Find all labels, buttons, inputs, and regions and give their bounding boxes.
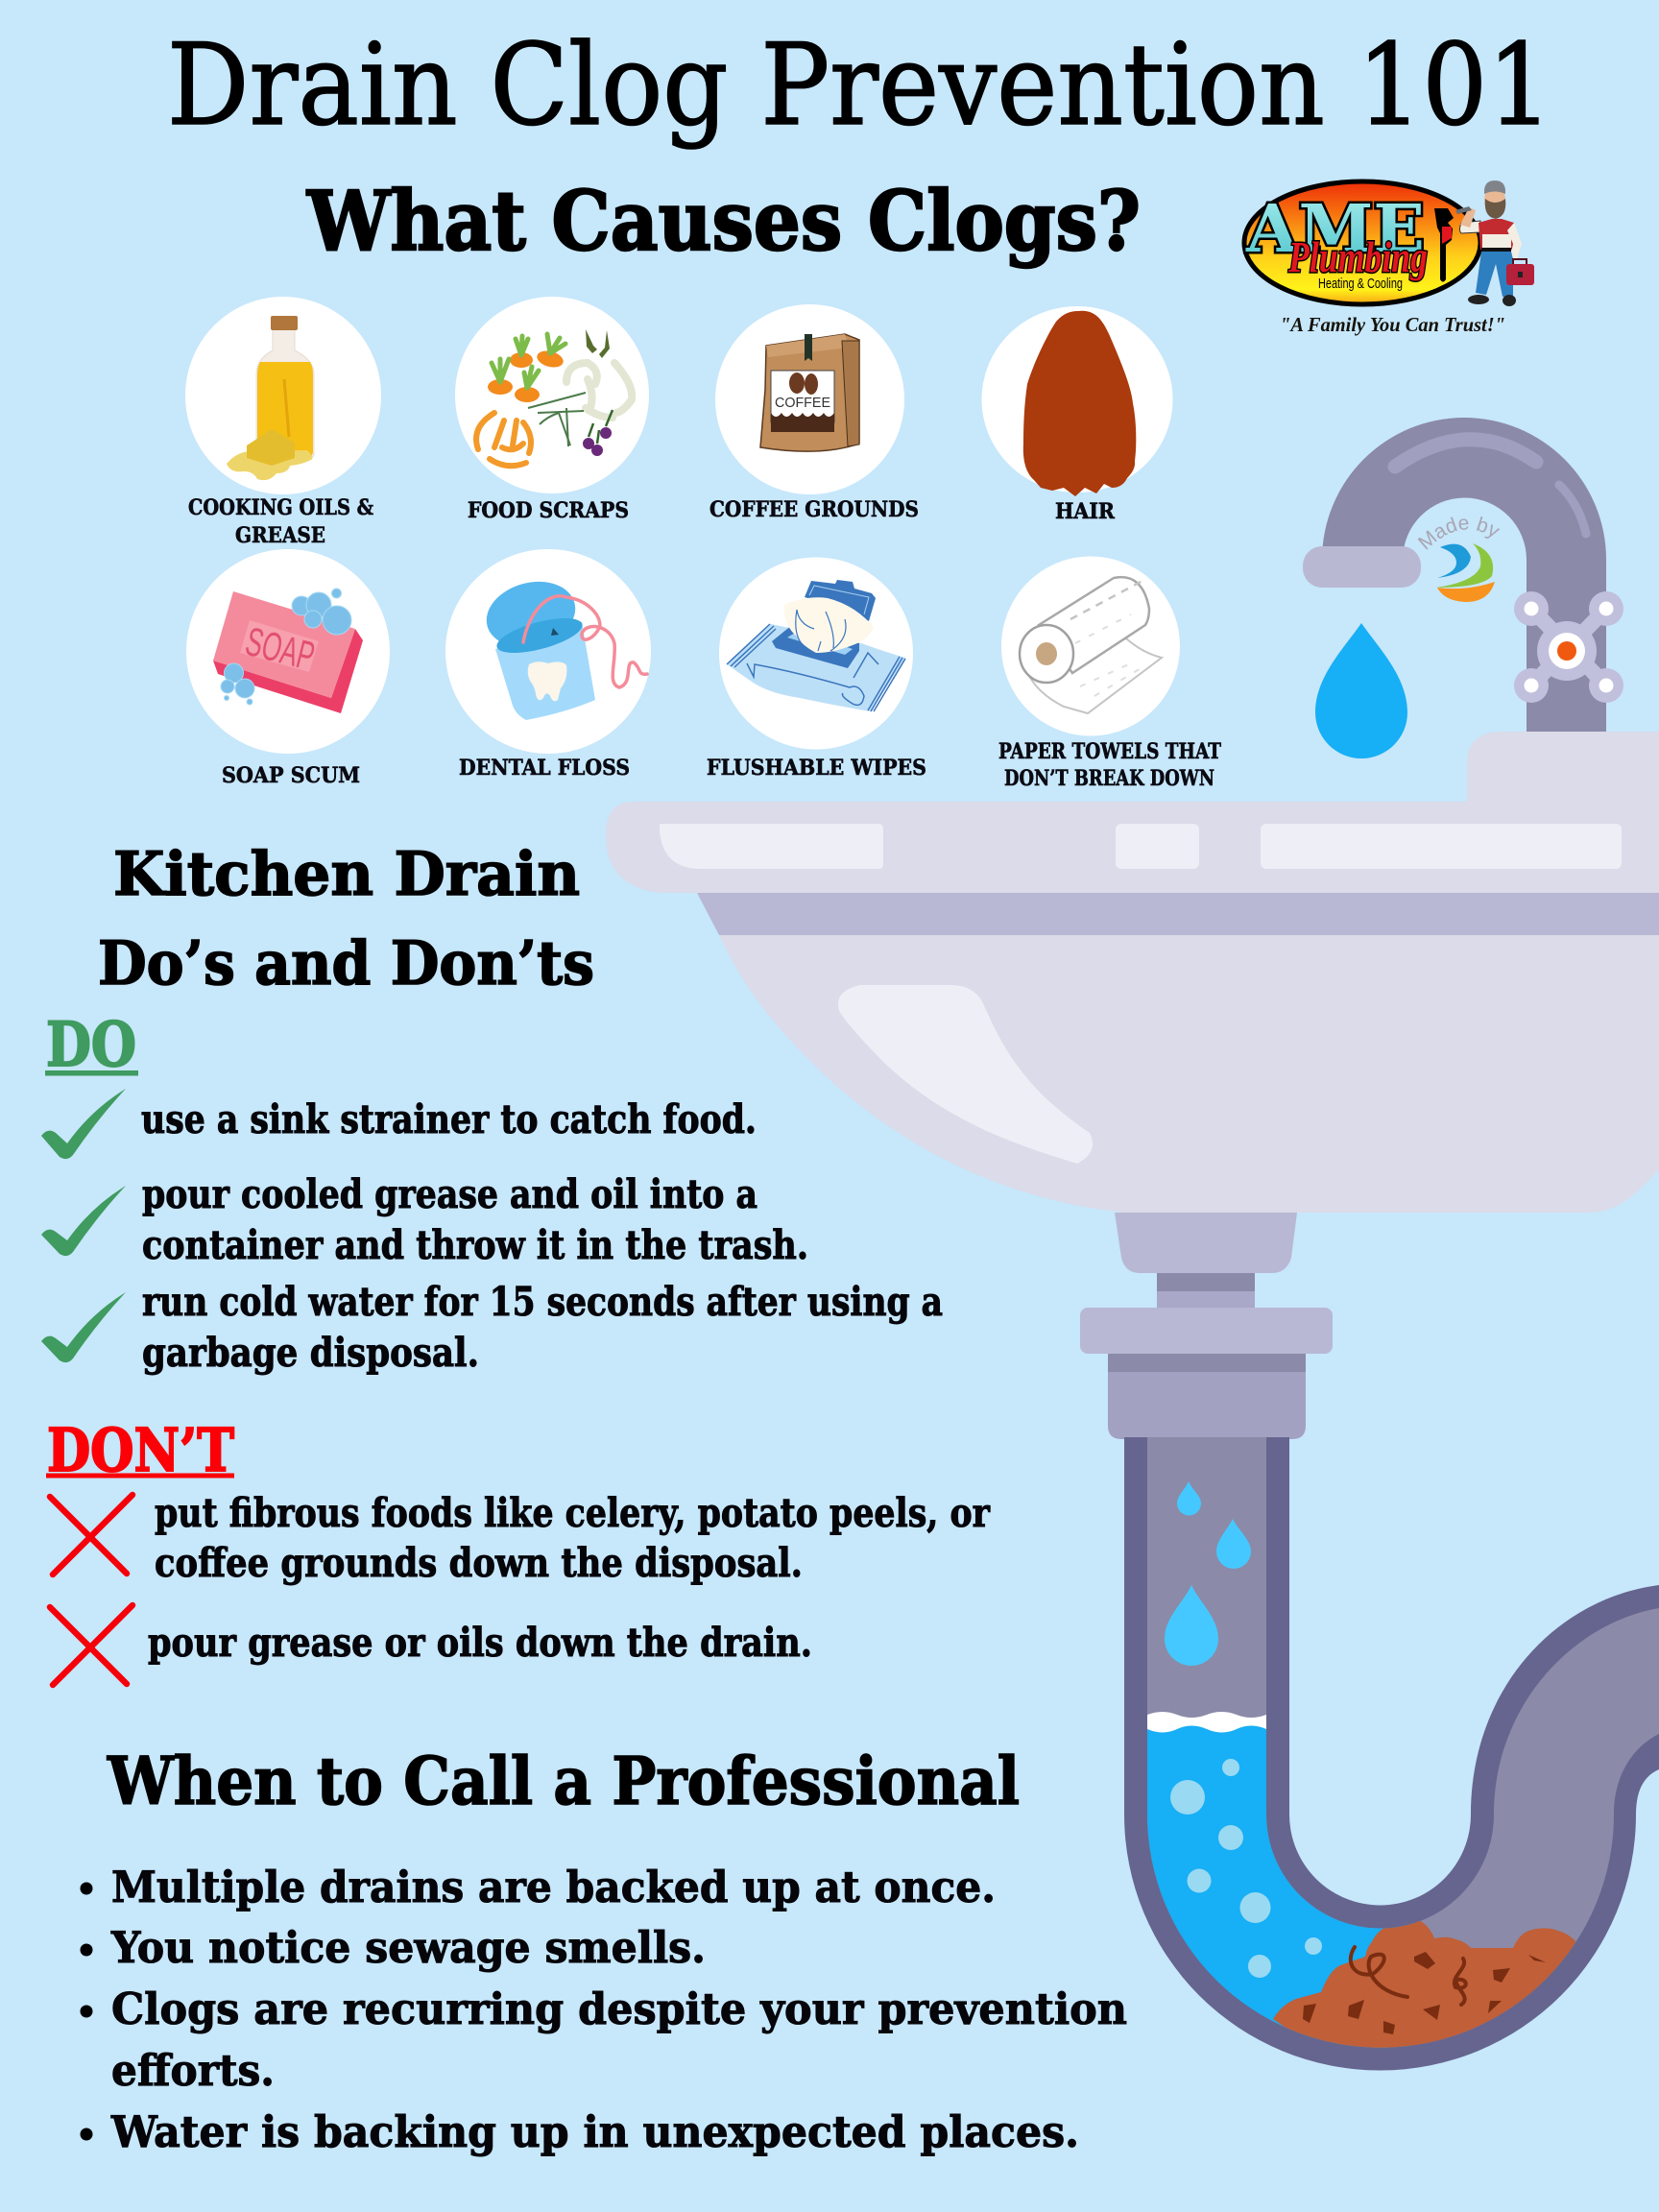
icon: plumber mascot bbox=[1455, 180, 1534, 306]
heading: kitchen drain dos and donts bbox=[98, 838, 594, 998]
label: flushable wipes: FLUSHABLE WIPES bbox=[707, 756, 926, 781]
label: cooking oils: GREASE bbox=[235, 523, 325, 548]
cause: hair bbox=[981, 306, 1173, 524]
professional bullet list: Clogs are recurring despite your prevention bbox=[111, 1984, 1127, 2034]
do item 2: container and throw it in the trash. bbox=[142, 1222, 808, 1268]
logo: AME Plumbing: Plumbing bbox=[1287, 232, 1428, 281]
icon: cross 1 bbox=[50, 1495, 132, 1575]
title: Drain Clog Prevention 101 bbox=[167, 19, 1552, 151]
label: cooking oils: COOKING OILS & bbox=[188, 495, 373, 520]
logo: AME Plumbing: Heating & Cooling bbox=[1318, 276, 1403, 292]
do item 3: garbage disposal. bbox=[142, 1330, 479, 1376]
heading: what causes clogs: What Causes Clogs? bbox=[306, 174, 1141, 270]
icon: water drop bbox=[1315, 623, 1407, 758]
logo: AME Plumbing bbox=[1244, 180, 1534, 306]
clog debris bbox=[1273, 1921, 1575, 2055]
icon: faucet handle bbox=[1514, 591, 1623, 703]
label: paper towels: PAPER TOWELS THAT bbox=[998, 739, 1222, 764]
do item 3: run cold water for 15 seconds after using a bbox=[142, 1279, 943, 1325]
dont item 2: pour grease or oils down the drain. bbox=[148, 1620, 812, 1666]
heading: kitchen drain dos and donts: Kitchen Drain bbox=[113, 838, 580, 909]
label: cooking oils bbox=[188, 495, 373, 548]
maker badge: made by: Made by bbox=[1417, 517, 1500, 549]
dont heading: DON’T bbox=[47, 1415, 234, 1485]
cause: cooking oils and grease bbox=[185, 297, 381, 548]
p-trap pipe bbox=[1124, 1437, 1659, 2070]
tagline: "A Family You Can Trust!" bbox=[1280, 313, 1505, 336]
label: hair: HAIR bbox=[1055, 499, 1116, 524]
water in trap bbox=[1147, 1712, 1575, 2055]
professional bullet list: Water is backing up in unexpected places. bbox=[110, 2106, 1079, 2157]
logo: AME Plumbing: AME bbox=[1245, 191, 1425, 268]
heading: kitchen drain dos and donts: Do’s and Don’ts bbox=[98, 927, 594, 998]
icon: falling drops bbox=[1165, 1481, 1251, 1666]
dont item 1: coffee grounds down the disposal. bbox=[155, 1540, 803, 1586]
professional bullet list: efforts. bbox=[111, 2045, 275, 2096]
cause: food scraps bbox=[455, 297, 649, 523]
cause: flushable wipes bbox=[707, 557, 926, 781]
do item 3 bbox=[142, 1279, 943, 1376]
professional bullet list: Multiple drains are backed up at once. bbox=[111, 1862, 996, 1912]
cause: soap scum bbox=[186, 549, 390, 788]
icon: check 1 bbox=[41, 1089, 126, 1159]
dont item 1 bbox=[155, 1490, 991, 1586]
heading: when to call a professional: When to Call a Professional bbox=[107, 1743, 1020, 1820]
cause: coffee grounds bbox=[709, 304, 919, 522]
icon: check 3 bbox=[41, 1292, 126, 1362]
do item 2 bbox=[142, 1171, 808, 1268]
label: paper towels: DON’T BREAK DOWN bbox=[1004, 766, 1214, 791]
cause: soap scum: SOAP bbox=[241, 618, 319, 679]
drain fittings bbox=[1080, 1213, 1333, 1439]
label: paper towels bbox=[998, 739, 1222, 791]
label: dental floss: DENTAL FLOSS bbox=[459, 756, 630, 781]
cause: paper towels bbox=[998, 557, 1222, 791]
label: coffee grounds: COFFEE GROUNDS bbox=[709, 497, 919, 522]
maker badge: made by bbox=[1417, 517, 1500, 602]
label: food scraps: FOOD SCRAPS bbox=[468, 498, 629, 523]
do item 1: use a sink strainer to catch food. bbox=[141, 1096, 757, 1142]
cause: dental floss bbox=[445, 549, 651, 781]
icon: check 2 bbox=[41, 1186, 126, 1256]
do item 2: pour cooled grease and oil into a bbox=[142, 1171, 757, 1217]
dont item 1: put fibrous foods like celery, potato peels, or bbox=[155, 1490, 991, 1536]
label: soap scum: SOAP SCUM bbox=[222, 763, 360, 788]
do heading: DO bbox=[46, 1009, 136, 1081]
professional bullet list: You notice sewage smells. bbox=[110, 1922, 706, 1973]
faucet bbox=[1303, 418, 1623, 733]
cause: coffee grounds: COFFEE bbox=[775, 395, 830, 411]
professional bullet list bbox=[81, 1862, 1127, 2157]
sink bbox=[606, 732, 1659, 1213]
icon: cross 2 bbox=[50, 1605, 132, 1685]
